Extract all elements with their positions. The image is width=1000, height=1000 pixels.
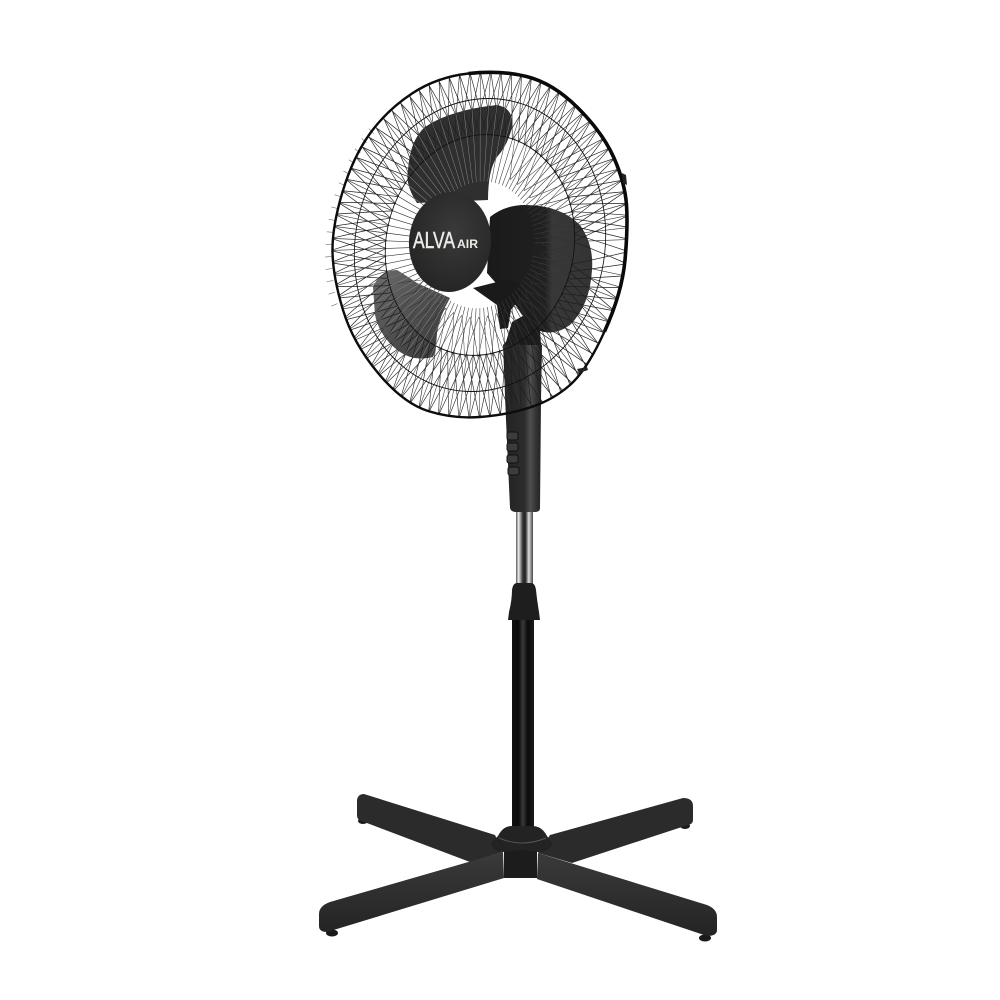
- hub logo: ALVA: [413, 227, 455, 253]
- wire guard mesh: [334, 74, 626, 416]
- rim clips: [577, 173, 627, 373]
- foot pads: [326, 818, 711, 942]
- fan head: [325, 70, 629, 419]
- control buttons: [507, 432, 519, 475]
- back left leg: [357, 794, 503, 862]
- base hub: [491, 826, 552, 878]
- chrome tube: [516, 510, 533, 586]
- infographic: pedestal fan product image: [319, 70, 717, 942]
- wire highlights on lower blade: [374, 273, 448, 359]
- blade: right: [487, 205, 592, 333]
- guard rings: [354, 98, 606, 392]
- back right leg: [538, 798, 693, 863]
- thick rim arc: [468, 72, 627, 332]
- inner mesh wires: [388, 138, 576, 358]
- outer rim: [332, 72, 627, 417]
- radial wires: [334, 74, 626, 416]
- height adjustment collar: [508, 583, 540, 620]
- blade: lower left: [373, 270, 450, 359]
- motor bracket: [473, 280, 522, 329]
- pivot joint: [505, 312, 541, 345]
- hub logo: AIR: [457, 239, 479, 251]
- pole: lower black tube: [512, 618, 534, 833]
- control housing: [503, 336, 542, 512]
- left overshoot ticks: [296, 120, 389, 310]
- crossing mesh wires: [334, 74, 626, 416]
- front right leg: [537, 853, 717, 936]
- front left leg: [319, 852, 504, 932]
- blade: top: [407, 105, 512, 203]
- base: cross legs: [319, 794, 717, 942]
- wire highlights on top blade: [408, 105, 512, 203]
- hub: [406, 189, 494, 295]
